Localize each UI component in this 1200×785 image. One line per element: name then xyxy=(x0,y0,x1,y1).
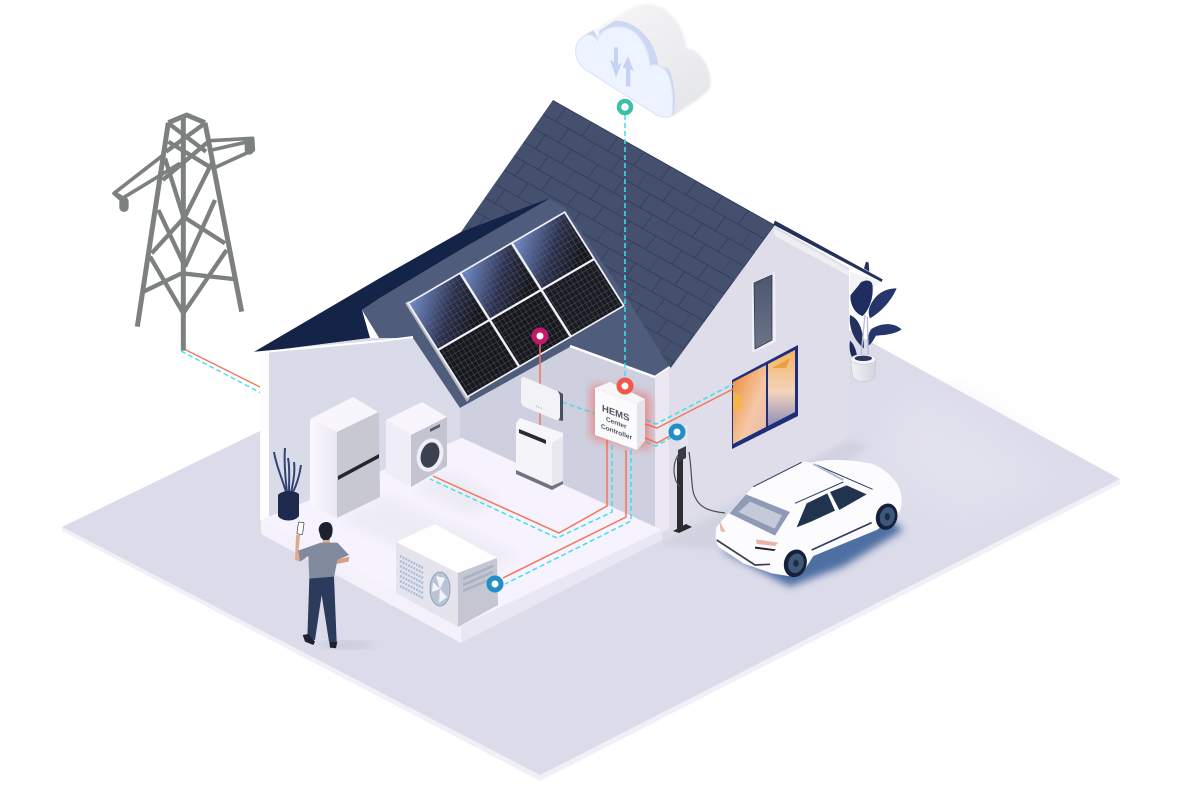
side windows xyxy=(797,493,835,527)
arm xyxy=(295,535,302,562)
grille xyxy=(400,556,423,598)
white cut wall edges xyxy=(252,337,670,536)
phone xyxy=(297,522,304,535)
Center label: Center xyxy=(606,416,627,431)
large lit window xyxy=(732,345,798,449)
icon: up and down arrows xyxy=(610,47,634,87)
battery storage xyxy=(516,418,563,490)
node: solar link xyxy=(534,330,546,342)
eave and plant beside house xyxy=(773,221,902,382)
node: charger link xyxy=(671,426,683,438)
small upper window xyxy=(752,272,776,353)
top row of solar cells xyxy=(409,213,593,349)
inverter xyxy=(521,377,563,421)
icon: data cloud xyxy=(576,4,711,117)
car details xyxy=(812,523,872,550)
car body xyxy=(716,460,902,576)
main shingled roof xyxy=(461,100,775,369)
neck xyxy=(323,537,330,544)
wall top trim xyxy=(773,228,849,276)
HEMS controller xyxy=(591,382,650,450)
plant xyxy=(850,281,902,362)
interior back wall, left part xyxy=(269,338,460,526)
right exterior wall xyxy=(669,226,849,529)
node: heat pump link xyxy=(489,578,501,590)
red power lines xyxy=(433,344,733,578)
roof rails xyxy=(753,462,843,503)
plant pot xyxy=(851,354,876,382)
icon: electricity pylon xyxy=(114,115,253,351)
trousers xyxy=(307,577,337,642)
dark eave xyxy=(773,221,883,282)
solar panel array xyxy=(405,211,625,402)
front wheel xyxy=(873,501,900,532)
person with phone xyxy=(295,522,373,649)
bottom row of solar cells xyxy=(439,260,623,396)
node: HEMS link xyxy=(619,380,631,392)
HEMS label: HEMS xyxy=(602,403,630,424)
ground platform xyxy=(62,300,1120,781)
Controller label: Controller xyxy=(601,423,632,442)
rear wheel xyxy=(781,547,810,580)
cyan data lines xyxy=(430,115,733,584)
fan xyxy=(430,572,450,606)
potted plant in room xyxy=(274,448,301,520)
node: cloud link xyxy=(619,101,631,113)
white eave underside xyxy=(850,272,882,292)
EV charger xyxy=(673,424,725,533)
dark navy left roof edge xyxy=(252,198,550,353)
wiring xyxy=(433,344,733,578)
car shadow xyxy=(720,517,903,587)
head xyxy=(319,522,333,540)
fridge xyxy=(310,397,380,518)
interior back wall, right part xyxy=(460,347,655,532)
room floor xyxy=(261,438,662,643)
shoes xyxy=(303,634,337,648)
vents xyxy=(463,566,493,591)
smooth slate roof section xyxy=(362,199,670,408)
power line from pylon to house xyxy=(181,349,262,393)
car xyxy=(716,460,903,587)
air source heat pump xyxy=(396,524,498,627)
shirt xyxy=(298,543,349,579)
rear window xyxy=(729,494,790,536)
washing machine xyxy=(386,402,448,487)
